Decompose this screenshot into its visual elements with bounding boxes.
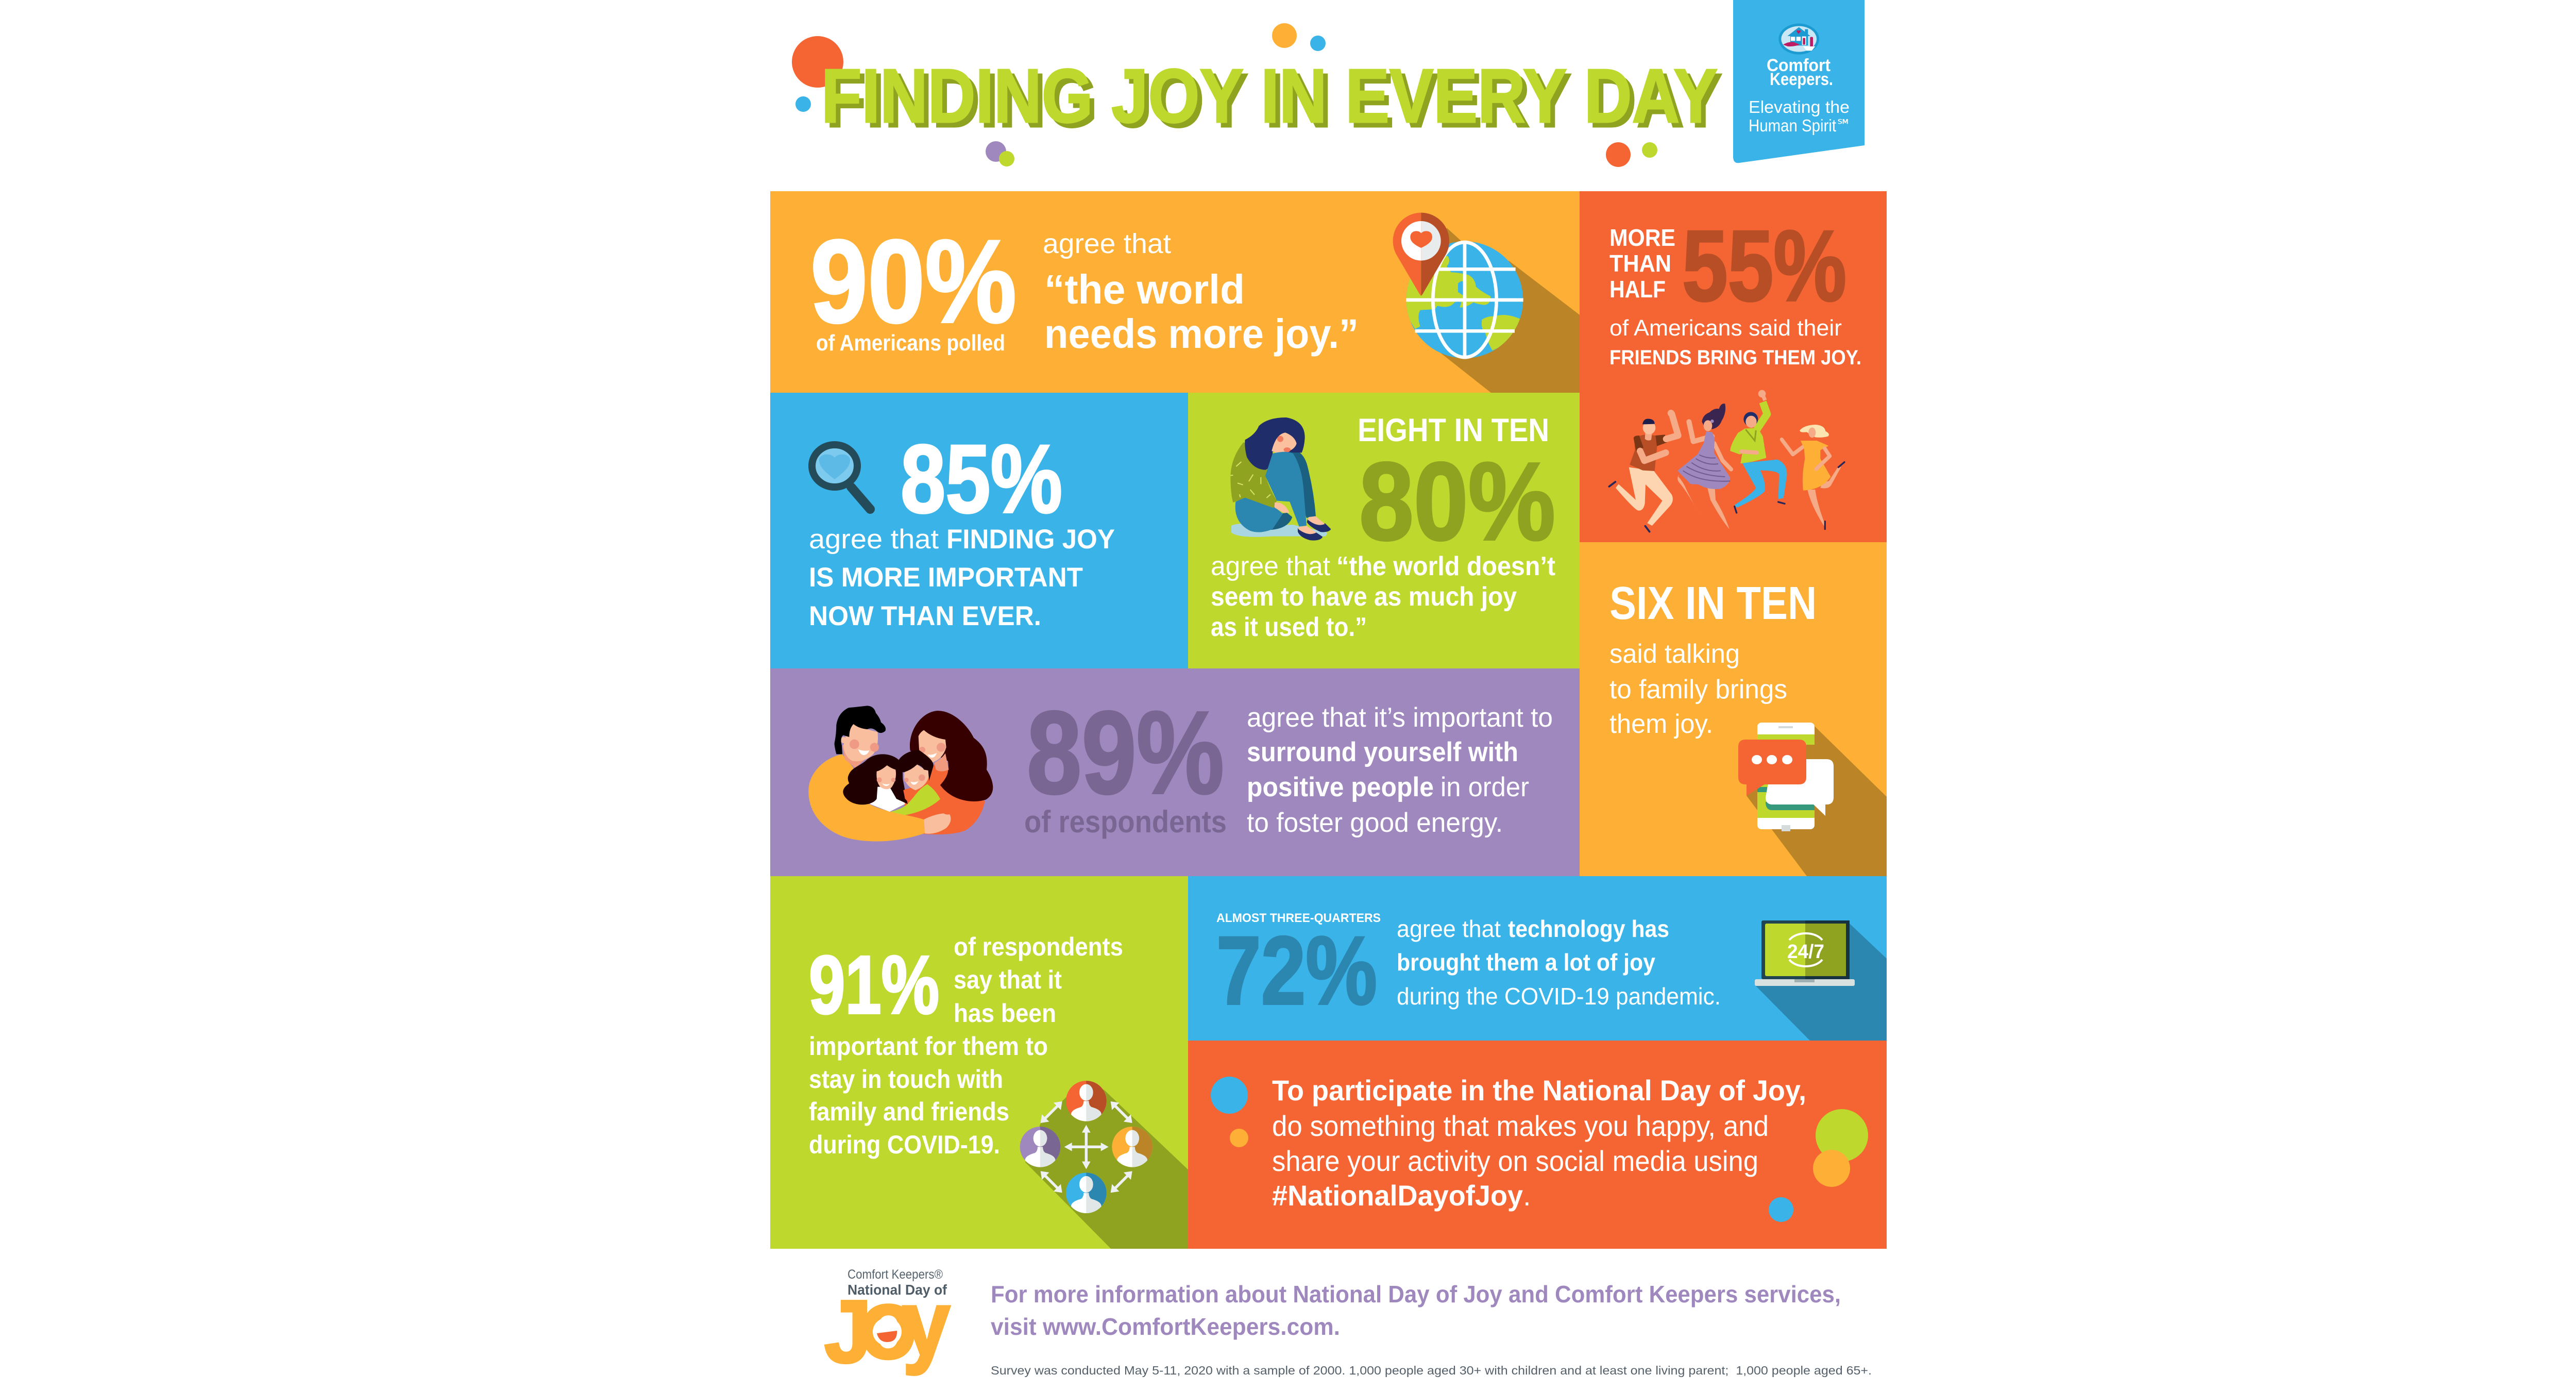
- long shadow behind globe: [1437, 228, 1580, 393]
- text: agree that the world doesn't seem to have as much joy: [1211, 551, 1555, 642]
- stat: 55%: 55%: [1682, 210, 1846, 322]
- text: to participate in the National Day of Joy: #NationalDayofJoy: [1272, 1179, 1523, 1212]
- text: surround yourself with positive people: positive people: [1247, 772, 1434, 802]
- text: of respondents say it has been important to stay in touch: important for them to: [809, 1032, 1048, 1061]
- stat: 89% of respondents: 89%: [1027, 688, 1224, 818]
- illustration: hugging family: [808, 706, 993, 842]
- panel: 85% finding joy: [770, 393, 1188, 668]
- text: more information link: visit www.ComfortKeepers.com.: [991, 1313, 1340, 1340]
- logo: Comfort Keepers National Day of Joy: J: [824, 1282, 872, 1381]
- banner: Comfort Keepers logo: Human Spirit℠: [1749, 116, 1852, 135]
- text: said talking to family brings them joy: them joy.: [1609, 709, 1713, 739]
- text: agree that finding joy is more important now than ever: NOW THAN EVER.: [809, 601, 1041, 631]
- text: of Americans said their friends bring them joy: of Americans said their: [1609, 315, 1842, 341]
- icon: Comfort Keepers house emblem: [1778, 24, 1819, 55]
- text: agree that the world doesn't seem to have as much joy: “the world doesn’t: [1336, 551, 1555, 581]
- label: almost three-quarters: ALMOST THREE-QUARTERS: [1216, 911, 1381, 925]
- panel: 72% technology: [1188, 876, 1887, 1041]
- infographic canvas: [770, 0, 1887, 1377]
- text: to participate in the National Day of Joy: [1272, 1074, 1806, 1212]
- illustration: four friends dancing: [1609, 390, 1844, 532]
- stat: 89% of respondents: of respondents: [1024, 805, 1227, 839]
- text: agree that the world doesn't seem to have as much joy: agree that: [1211, 551, 1331, 581]
- stat: 90%: 90%: [810, 215, 1016, 347]
- text: survey footnote: Survey was conducted May 5-11, 2020 with a sample of 2000. 1,000 people aged 30+ with children and at least one living parent; 1,000 people aged 65+.: [991, 1364, 1872, 1377]
- panel: 55% friends bring joy: [1580, 191, 1887, 542]
- illustration: sad woman sitting: [1230, 417, 1331, 541]
- quote: the world needs more joy: [1044, 266, 1359, 357]
- text: agree that finding joy is more important now than ever: agree that: [809, 524, 939, 555]
- text: surround yourself with positive people: surround yourself with: [1247, 737, 1518, 767]
- text: said talking to family brings them joy: [1609, 639, 1787, 739]
- logo: Comfort Keepers National Day of Joy: o: [859, 1268, 917, 1379]
- long shadow behind laptop: [1756, 924, 1887, 1041]
- text: agree that: agree that: [1043, 228, 1171, 259]
- text: agree that the world doesn't seem to have as much joy: as it used to.”: [1211, 612, 1367, 642]
- icon: magnifying glass with heart: [812, 445, 870, 509]
- logo: Comfort Keepers National Day of Joy: [824, 1267, 950, 1381]
- label: more than half: THAN: [1609, 250, 1671, 277]
- stat: 80%: 80%: [1359, 439, 1555, 563]
- text: of respondents say it has been important to stay in touch: during COVID-19.: [809, 1130, 1000, 1159]
- logo: Comfort Keepers National Day of Joy: Comfort Keepers®: [848, 1267, 943, 1282]
- text: to participate in the National Day of Joy: .: [1523, 1179, 1531, 1212]
- text: agree that technology has brought joy: brought them a lot of joy: [1397, 949, 1655, 976]
- text: to participate in the National Day of Joy: share your activity on social media using: [1272, 1145, 1758, 1177]
- caption: of Americans polled: of Americans polled: [816, 330, 1005, 356]
- icon: laptop showing 24/7: [1755, 920, 1855, 986]
- label: more than half: MORE: [1609, 224, 1675, 251]
- text: to participate in the National Day of Joy: do something that makes you happy, and: [1272, 1110, 1769, 1142]
- text: more information link: [991, 1281, 1841, 1340]
- banner: Comfort Keepers logo: Comfort: [1767, 56, 1831, 75]
- text: surround yourself with positive people: to foster good energy.: [1247, 808, 1503, 838]
- text: agree that finding joy is more important now than ever: [809, 524, 1115, 631]
- text: of respondents say it has been important to stay in touch: of respondents: [954, 932, 1123, 961]
- stat: 85%: 85%: [901, 425, 1062, 533]
- text: of Americans said their friends bring them joy: FRIENDS BRING THEM JOY.: [1609, 346, 1861, 369]
- text: of respondents say it has been important to stay in touch: stay in touch with: [809, 1065, 1003, 1094]
- title: FINDING JOY IN EVERY DAY: [821, 54, 1718, 139]
- decorative dots: [1211, 1077, 1868, 1222]
- text: of respondents say it has been important to stay in touch: family and friends: [809, 1097, 1009, 1126]
- text: of respondents say it has been important to stay in touch: [809, 932, 1123, 1159]
- icon: globe with heart location pin: [1393, 213, 1523, 358]
- text: said talking to family brings them joy: to family brings: [1609, 675, 1787, 705]
- dancer four: [1782, 425, 1844, 529]
- text: surround yourself with positive people: in order: [1440, 772, 1529, 802]
- stat: 91%: 91%: [809, 938, 939, 1031]
- heading: six in ten: SIX IN TEN: [1609, 578, 1817, 629]
- logo: Comfort Keepers National Day of Joy: National Day of: [848, 1282, 947, 1298]
- label: more than half: [1609, 224, 1675, 303]
- text: agree that finding joy is more important now than ever: IS MORE IMPORTANT: [809, 562, 1083, 593]
- panel: six in ten: [1580, 542, 1887, 876]
- text: more information link: For more information about National Day of Joy and Comfort Keepers services,: [991, 1281, 1841, 1308]
- dancer three: [1730, 390, 1787, 513]
- label: more than half: HALF: [1609, 276, 1666, 303]
- banner: Comfort Keepers logo: Keepers.: [1770, 70, 1833, 89]
- logo: Comfort Keepers National Day of Joy: y: [903, 1272, 950, 1376]
- text: agree that technology has brought joy: agree that: [1397, 915, 1501, 942]
- banner: Comfort Keepers logo: Elevating the: [1749, 97, 1850, 116]
- icon: connected people network: [1020, 1081, 1188, 1249]
- icon: laptop showing 24/7: 24/7: [1787, 941, 1824, 963]
- panel: 89% positive people: [770, 668, 1580, 876]
- text: agree that technology has brought joy: [1397, 915, 1721, 1010]
- panel: 91% stay in touch: [770, 876, 1188, 1249]
- text: agree that the world doesn't seem to have as much joy: seem to have as much joy: [1211, 582, 1517, 612]
- icon: phone with chat bubbles: [1738, 723, 1834, 831]
- text: surround yourself with positive people: agree that it’s important to: [1247, 702, 1553, 733]
- text: said talking to family brings them joy: said talking: [1609, 639, 1740, 669]
- header decorative dots: [792, 23, 1657, 167]
- text: of respondents say it has been important to stay in touch: say that it: [954, 965, 1062, 994]
- label: eight in ten: EIGHT IN TEN: [1358, 412, 1549, 448]
- text: of respondents say it has been important to stay in touch: has been: [954, 999, 1056, 1028]
- dancer one: [1609, 410, 1678, 532]
- text: of Americans said their friends bring them joy: [1609, 315, 1861, 369]
- stat: 72%: 72%: [1216, 916, 1377, 1025]
- panel: call to action: [1188, 1041, 1887, 1249]
- text: agree that technology has brought joy: technology has: [1508, 915, 1669, 942]
- banner: Comfort Keepers logo: [1733, 0, 1865, 163]
- long shadow behind phone: [1747, 726, 1887, 876]
- quote: the world needs more joy: needs more joy.”: [1044, 311, 1359, 357]
- dancer two: [1677, 404, 1731, 529]
- text: agree that finding joy is more important now than ever: FINDING JOY: [946, 524, 1115, 555]
- text: surround yourself with positive people: [1247, 702, 1553, 838]
- text: to participate in the National Day of Joy: To participate in the National Day of Joy,: [1272, 1074, 1806, 1107]
- panel: 90% world needs more joy: [770, 191, 1580, 393]
- text: agree that technology has brought joy: during the COVID-19 pandemic.: [1397, 983, 1721, 1010]
- quote: the world needs more joy: “the world: [1044, 266, 1245, 312]
- panel: 80% eight in ten: [1188, 393, 1580, 668]
